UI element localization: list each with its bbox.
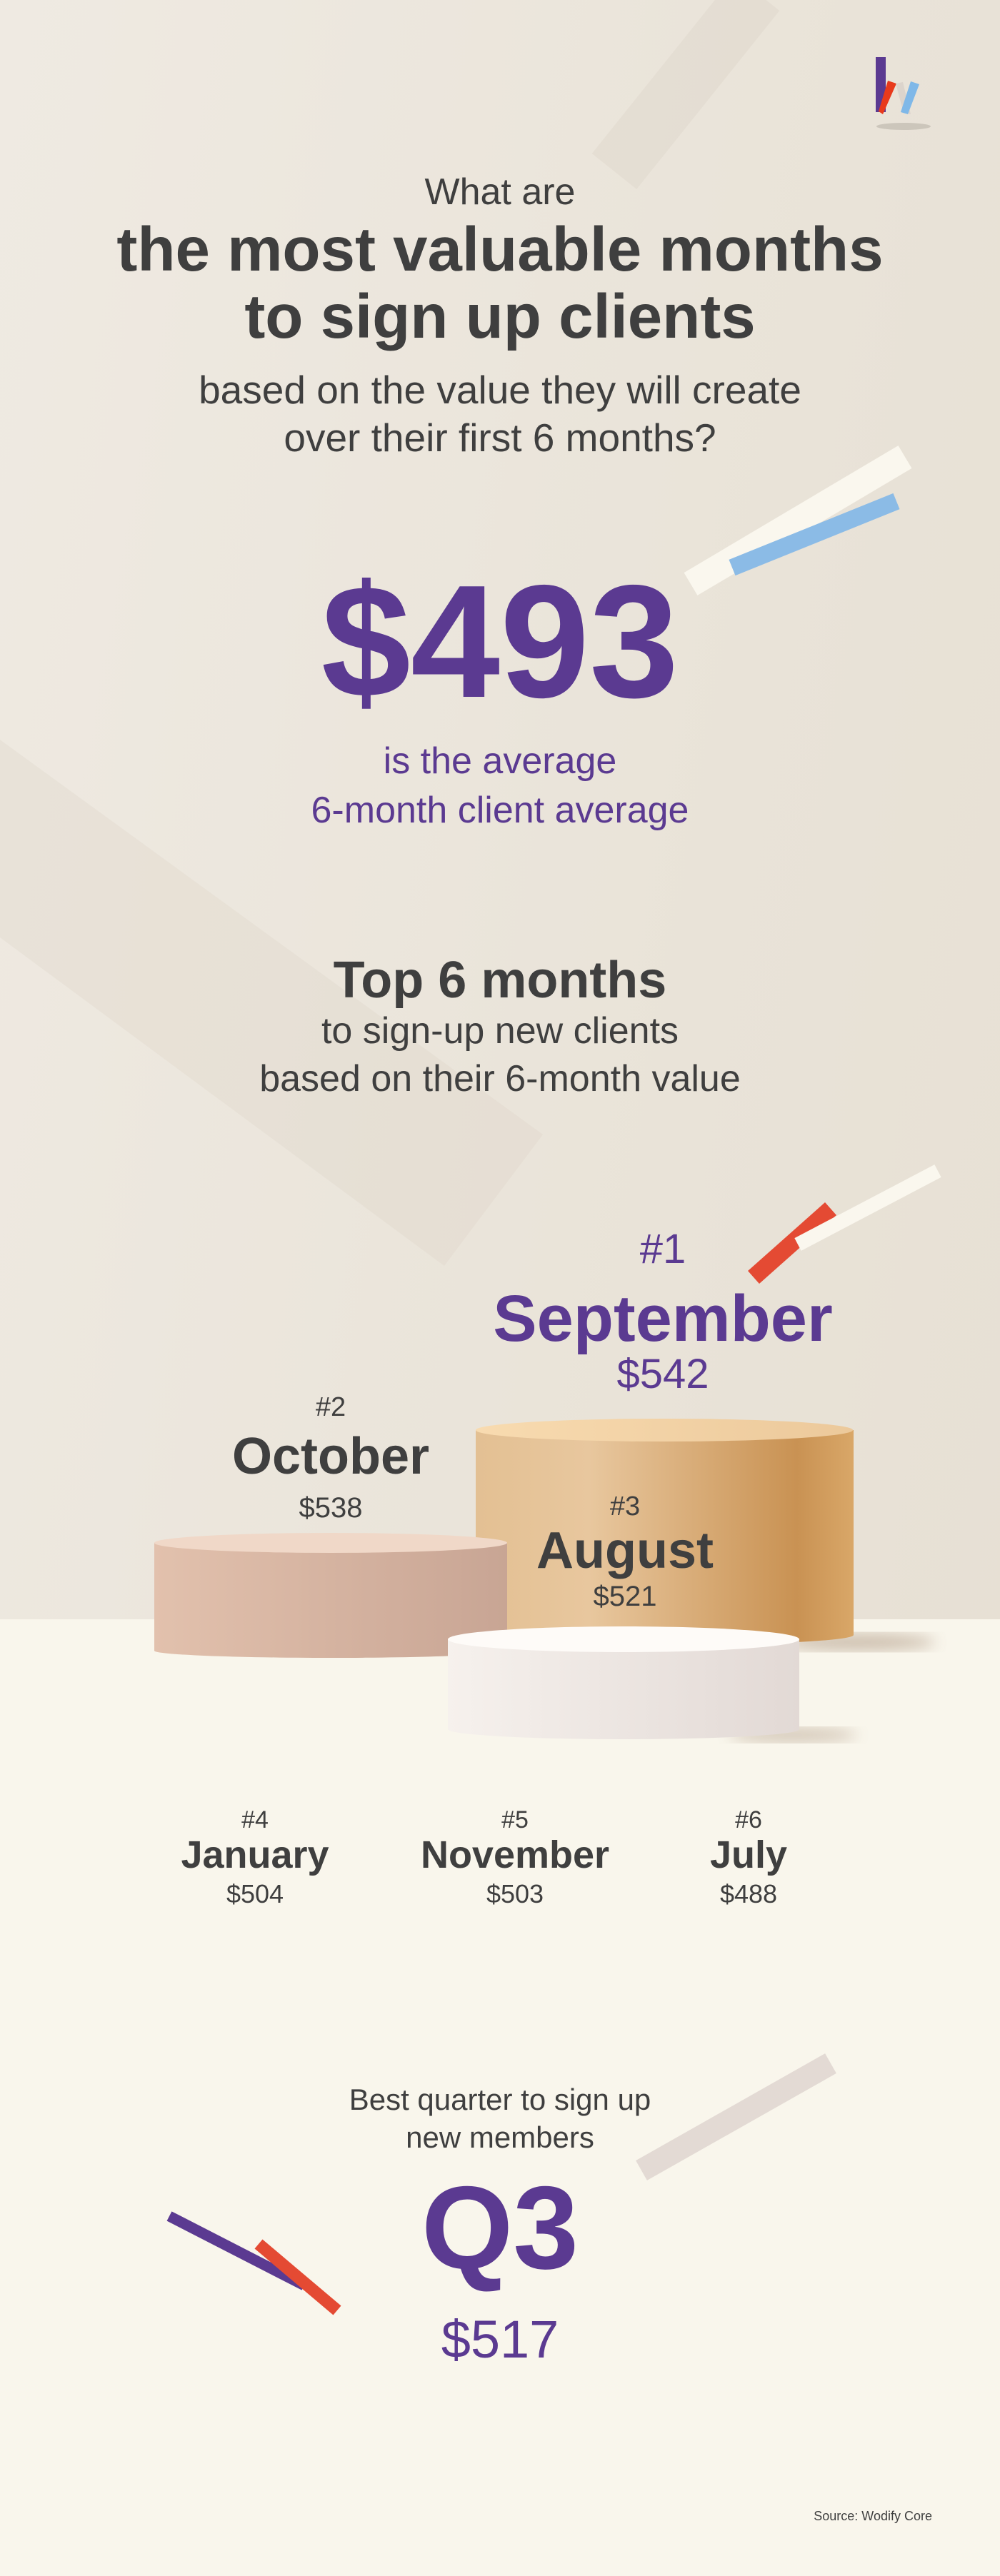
source: Source: Wodify Core <box>814 2509 932 2523</box>
text: #6 <box>735 1806 762 1833</box>
text: July <box>710 1833 787 1876</box>
text: over their first 6 months? <box>284 416 716 460</box>
text: #2 <box>316 1392 346 1422</box>
podiums <box>154 1419 937 1744</box>
text: $493 <box>321 551 679 731</box>
average stat <box>311 551 689 831</box>
top 6 heading <box>259 952 741 1100</box>
text: based on their 6-month value <box>259 1058 741 1100</box>
text: $542 <box>616 1351 709 1397</box>
text: to sign-up new clients <box>321 1010 679 1052</box>
text: Best quarter to sign up <box>349 2083 651 2116</box>
icon: logo <box>876 57 931 130</box>
text: November <box>421 1833 609 1876</box>
text: January <box>181 1833 329 1876</box>
rank 4 January <box>181 1806 329 1908</box>
text: to sign up clients <box>244 282 756 351</box>
best quarter <box>349 2083 651 2369</box>
rank 3 August <box>536 1491 714 1612</box>
title block <box>116 171 884 460</box>
text: Q3 <box>421 2162 579 2293</box>
white podium <box>448 1626 857 1742</box>
rank 5 November <box>421 1806 609 1908</box>
text: 6-month client average <box>311 790 689 831</box>
text: September <box>493 1282 833 1355</box>
text: is the average <box>384 740 616 782</box>
text: #1 <box>640 1226 686 1272</box>
text: the most valuable months <box>116 215 884 284</box>
text: $517 <box>441 2310 559 2369</box>
text: #4 <box>241 1806 269 1833</box>
text: new members <box>406 2120 594 2154</box>
rank 1 September <box>493 1226 833 1397</box>
text: October <box>232 1428 429 1485</box>
text: $521 <box>593 1581 656 1612</box>
text: #5 <box>501 1806 529 1833</box>
rank 2 October <box>232 1392 429 1524</box>
rank 6 July <box>710 1806 787 1908</box>
floor <box>0 1619 1000 2576</box>
text: based on the value they will create <box>199 368 801 412</box>
pink podium <box>154 1533 507 1658</box>
text: August <box>536 1522 714 1579</box>
text: $488 <box>720 1879 777 1908</box>
text: What are <box>424 171 575 213</box>
text: $504 <box>226 1879 284 1908</box>
text: $538 <box>299 1492 362 1524</box>
text: #3 <box>610 1491 640 1521</box>
text: $503 <box>486 1879 544 1908</box>
text: Top 6 months <box>334 952 666 1009</box>
orange podium <box>476 1419 936 1651</box>
